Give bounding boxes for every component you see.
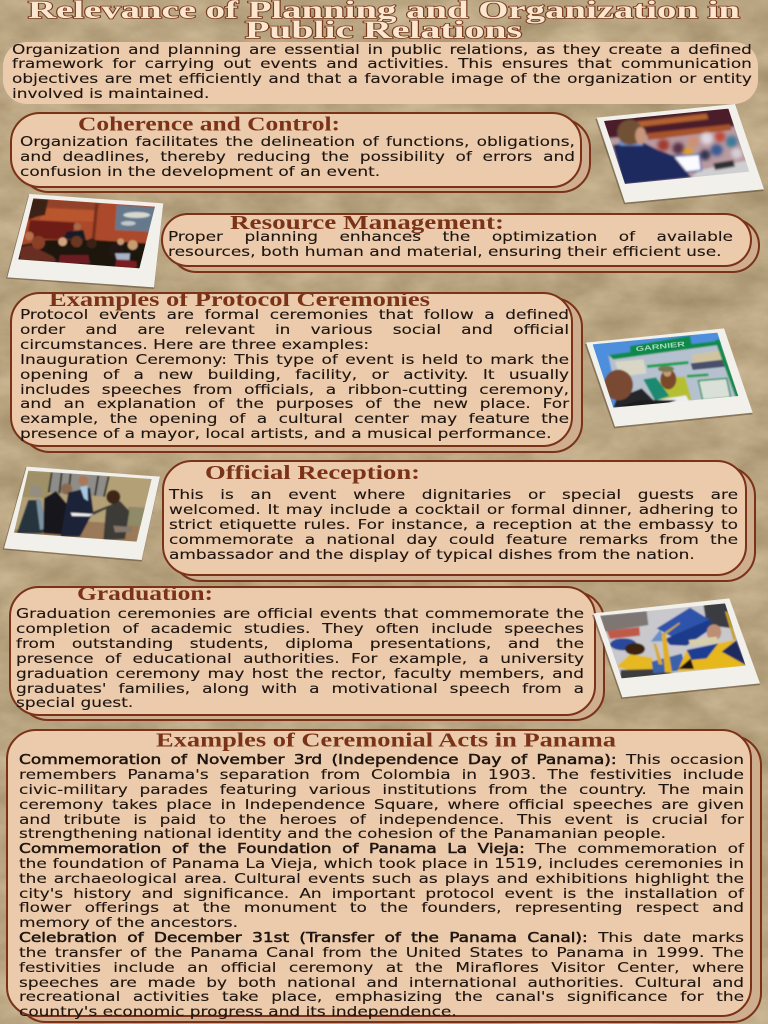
photo: conference room with speaker [6,194,164,289]
text: resource management: Proper planning enhances the optimization of available [168,229,733,245]
text: protocol ceremonies and inauguration: presence of a mayor, local artists, and a musical performance. [20,426,552,442]
text: protocol ceremonies and inauguration: Protocol events are formal ceremonies that follow a defined [20,307,569,323]
text: protocol ceremonies and inauguration: includes speeches from officials, a ribbon-cutting ceremony, [20,382,569,398]
text: official reception: strict etiquette rules. For instance, a reception at the embassy to [169,517,738,533]
text: protocol ceremonies and inauguration: opening of a new building, facility, or activity. It usually [20,367,569,383]
text: ceremonial acts in panama: the archaeological area. Cultural events such as plays and exhibitions highlight the [19,871,744,887]
text: introduction: framework for carrying out events and activities. This ensures that communication [12,56,752,72]
panel: examples of protocol ceremonies [10,290,583,453]
text: protocol ceremonies and inauguration: order and are relevant in various social and official [20,322,569,338]
text: coherence and control [20,134,575,180]
text: ceremonial acts in panama: civic-military parades featuring various institutions from the country. The main [19,782,744,798]
text: protocol ceremonies and inauguration [20,307,570,442]
text: protocol ceremonies and inauguration: and an explanation of the purposes of the new place. For [20,396,569,412]
text: ceremonial acts in panama: the foundation of Panama La Vieja, which took place in 1519, includes ceremonies in [19,856,744,872]
heading: examples of ceremonial acts in panama: Examples of Ceremonial Acts in Panama [156,731,616,752]
text: graduation: Graduation ceremonies are official events that commemorate the [16,606,584,622]
text: ceremonial acts in panama: city's history and significance. An important protocol event is the installation of [19,886,744,902]
text: protocol ceremonies and inauguration: example, the opening of a cultural center may feature the [20,411,569,427]
text: official reception: This is an event where dignitaries or special guests are [169,487,738,503]
text: graduation: graduation ceremony may host the rector, faculty members, and [16,666,584,682]
text: ceremonial acts in panama [19,752,744,1020]
text: ceremonial acts in panama: the transfer of the Panama Canal from the United States to Panama in 1999. The [19,945,744,961]
text: resource management [168,229,733,260]
photo: branded booth with two women [584,328,753,428]
text: introduction: involved is maintained. [12,86,209,102]
text: resource management: resources, both human and material, ensuring their efficient use. [168,244,722,260]
text: coherence and control: and deadlines, thereby reducing the possibility of errors and [20,149,575,165]
panel: official reception [162,460,756,582]
text: graduation: from outstanding students, diploma presentations, and the [16,636,584,652]
text: protocol ceremonies and inauguration: Inauguration Ceremony: This type of event is held to mark the [20,352,569,368]
text: ceremonial acts in panama: ceremony takes place in Independence Square, where official speeches are given [19,797,744,813]
text: ceremonial acts in panama: and tribute is paid to the heroes of independence. This event is crucial for [19,812,744,828]
text: ceremonial acts in panama: Commemoration of the Foundation of Panama La Vieja: The commemoration of [19,841,744,857]
text: ceremonial acts in panama: festivities include an official ceremony at the Miraflores Visitor Center, where [19,960,744,976]
text: protocol ceremonies and inauguration: circumstances. Here are three examples: [20,337,369,353]
panel: examples of ceremonial acts in panama [6,729,762,1023]
text: official reception [168,487,738,563]
text: graduation: special guest. [16,695,133,711]
text: introduction: objectives are met efficiently and that a favorable image of the organization or entity [12,71,752,87]
panel: graduation [9,584,605,721]
text: introduction: Organization and planning are essential in public relations, as they create a defined [12,42,752,58]
text: ceremonial acts in panama: recreational activities take place, emphasizing the canal's significance for the [19,989,744,1005]
photo: official reception handshake [2,466,160,562]
text: ceremonial acts in panama: remembers Panama's separation from Colombia in 1903. The festivities include [19,767,744,783]
text: official reception: commemorate a national day could feature remarks from the [169,532,738,548]
heading: resource management: Resource Management: [230,212,504,233]
heading: graduation: Graduation: [77,584,213,605]
text: coherence and control: confusion in the development of an event. [20,164,380,180]
text: ceremonial acts in panama: memory of the ancestors. [19,915,238,931]
text: graduation: completion of academic studies. They often include speeches [16,621,584,637]
heading: coherence and control: Coherence and Control: [78,114,340,136]
heading: examples of protocol ceremonies: Examples of Protocol Ceremonies [49,290,431,311]
photo: speaker facing blurred audience [595,104,764,204]
text: ceremonial acts in panama: Celebration of December 31st (Transfer of the Panama Canal): This date marks [19,930,744,946]
text: official reception: welcomed. It may include a cocktail or formal dinner, adhering to [169,502,738,518]
panel: resource management [161,212,760,273]
text: ceremonial acts in panama: flower offerings at the monument to the founders, representing respect and [19,900,744,916]
text: ceremonial acts in panama: Commemoration of November 3rd (Independence Day of Panama): This occasion [19,752,744,768]
title [27,0,741,42]
text: official reception: ambassador and the display of typical dishes from the nation. [169,547,695,563]
panel: introduction [3,42,758,104]
text: ceremonial acts in panama: speeches are made by both national and international authorities. Cultural and [19,975,744,991]
text: introduction [12,42,752,102]
text: graduation: graduates' families, along with a motivational speech from a [16,681,584,697]
text: coherence and control: Organization facilitates the delineation of functions, obligations, [20,134,575,150]
booth sign lettering: GARNIER [635,341,685,353]
panel: coherence and control [10,112,591,193]
text: graduation: presence of educational authorities. For example, a university [16,651,584,667]
photo: graduates in caps and gowns [592,598,760,699]
text: graduation [16,606,584,711]
heading: official reception: Official Reception: [205,463,420,484]
text: ceremonial acts in panama: country's economic progress and its independence. [19,1004,457,1020]
text: ceremonial acts in panama: strengthening national identity and the cohesion of the Panamanian people. [19,826,666,842]
